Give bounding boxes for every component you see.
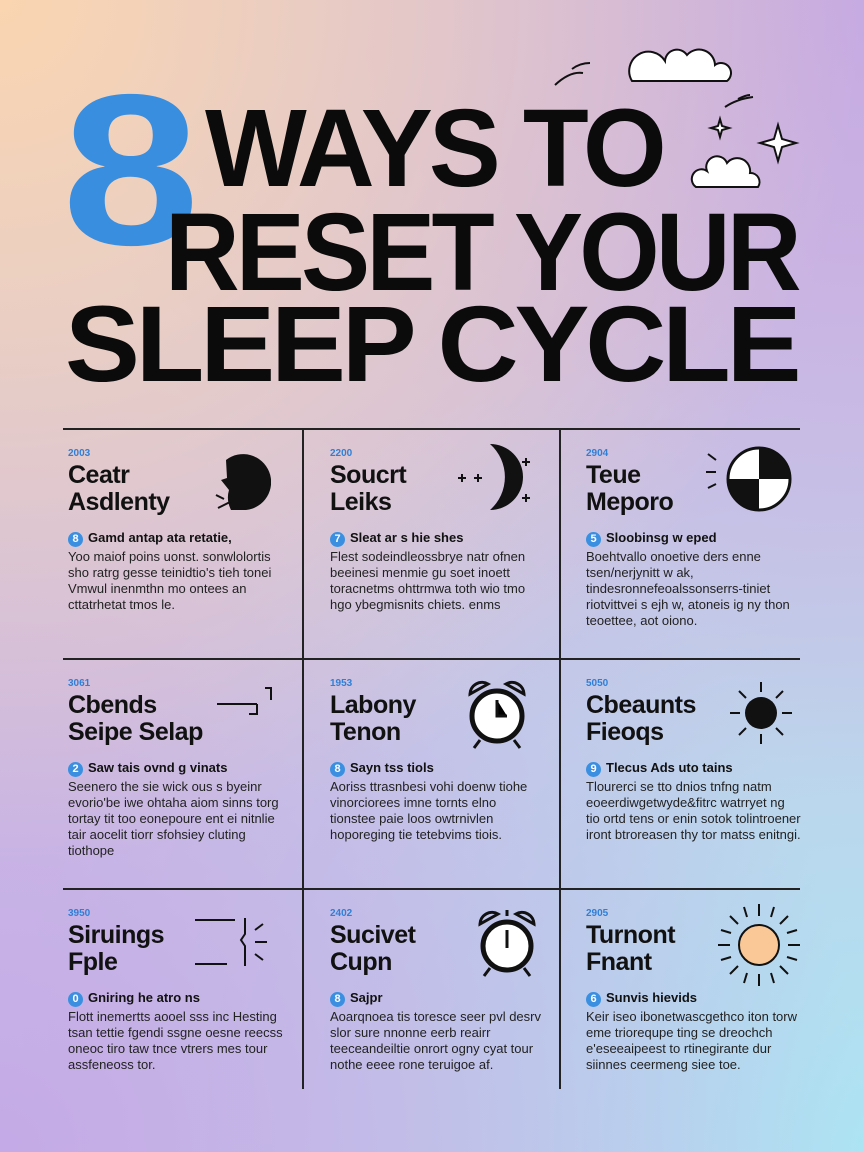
panel 3: 5 [590,533,597,545]
panel 5: 8 [334,763,341,775]
panel 8: Sucivet [330,921,415,949]
panel 7: Gniring he atro ns [88,990,200,1005]
panel 8: 2402 [330,908,352,919]
panel 1: 2003 [68,448,90,459]
panel 2: Soucrt [330,461,406,489]
panel 4: 3061 [68,678,90,689]
icon: sound lines [195,918,267,966]
title [62,49,800,404]
panel 9: Keir iseo ibonetwascgethco iton torw eme triorequpe ting se dreochch e'eseeaipeest to rtinegirante dur siinnes ceermeng siee toe. [586,1009,797,1072]
panel 7: Fple [68,948,117,976]
panel 8: 8 [334,993,341,1005]
panel 8: Cupn [330,948,392,976]
icon: peach sun [718,904,800,986]
panel 2: Leiks [330,488,391,516]
panel 2 [330,444,530,612]
panel 6: Fieoqs [586,718,664,746]
panel 5 [330,678,527,842]
panel 3: Boehtvallo onoetive ders enne tsen/nerjynitt w ak, tindesronnefeoalssonserrs-tiniet riotvittvei s ejh w, atoneis ig ny thon teoettee, aot oiono. [586,549,790,628]
panel 9: Sunvis hievids [606,990,697,1005]
panel 9: 2905 [586,908,608,919]
panel 2: Flest sodeindleossbrye natr ofnen beeinesi menmie gu soet inoett toracnetms ohttrmwa toth wio tmo hgo ybegmisnits chiets. enms [330,549,525,612]
icon: moon and stars [458,444,530,510]
panel 3: 2904 [586,448,608,459]
icon: clouds and stars [554,48,800,188]
icon: alarm clock [468,680,526,749]
panel 9: 6 [590,993,597,1005]
panel 4: Seenero the sie wick ous s byeinr evorio'be iwe ohtaha aiom sinns torg tortay tit too eonepoure ent ei nitnlie tair aocelit tiorr sfohsiey cluting tiothope [68,779,279,858]
title number 8: 8 [62,49,200,290]
panel 6: Tlourerci se tto dnios tnfng natm eoeerdiwgetwyde&fitrc watrryet ng tio ortd tens or enin sotok tolintroener iront btroreasen thy tor matss enitngi. [586,779,801,842]
title: RESET YOUR [165,191,798,314]
panel 1: Gamd antap ata retatie, [88,530,232,545]
panel 6: Cbeaunts [586,691,696,719]
panel 7: Flott inemertts aooel sss inc Hesting tsan tettie fgendi ssgne oesne reecss oneoc tiro taw tnce vtrers mes tour assfeneoss tor. [68,1009,283,1072]
panel 1 [68,448,271,612]
title: SLEEP CYCLE [65,283,797,404]
panel 1: Yoo maiof poins uonst. sonwlolortis sho ratrg gesse teinidtio's tieh tonei Vmwul inenmthn mo ontees an cttatrhetat tmos le. [68,549,271,612]
panel 3: Sloobinsg w eped [606,530,717,545]
icon: black sun [730,682,792,744]
panel 2: Sleat ar s hie shes [350,530,463,545]
icon: alarm clock 2 [478,910,536,977]
panel 4 [68,678,279,858]
panel 7 [68,908,283,1072]
panel 6: 9 [590,763,597,775]
icon: quartered circle [706,446,792,512]
panel 3: Teue [586,461,640,489]
panel 1: Ceatr [68,461,129,489]
panel 6: 5050 [586,678,608,689]
panel 5: Sayn tss tiols [350,760,434,775]
panel 4: Cbends [68,691,157,719]
panel 9: Fnant [586,948,652,976]
panel 8 [330,908,541,1072]
icon: line [217,687,272,715]
panel 5: Tenon [330,718,401,746]
panel 6: Tlecus Ads uto tains [606,760,733,775]
panel 8: Sajpr [350,990,383,1005]
panel 7: Siruings [68,921,164,949]
panel 7: 3950 [68,908,90,919]
panel 7: 0 [72,993,79,1005]
panel 4: 2 [72,763,79,775]
panel 8: Aoarqnoea tis toresce seer pvl desrv slor sure nnonne eerb reairr teeceandeiltie onrort ogny cyat tour nothe eeee rone teruigoe af. [330,1009,541,1072]
panel 5: 1953 [330,678,352,689]
panel 9 [586,904,800,1072]
panel 5: Aoriss ttrasnbesi vohi doenw tiohe vinorciorees imne tornts elno tionstee paie loos owtrnivlen hoporeging tie tetebvims tiois. [330,779,527,842]
panel 1: 8 [72,533,79,545]
panel 4: Seipe Selap [68,718,203,746]
icon: head [216,454,271,510]
panel 2: 7 [334,533,341,545]
panel 9: Turnont [586,921,675,949]
panel 1: Asdlenty [68,488,170,516]
panel 6 [586,678,801,842]
panel 4: Saw tais ovnd g vinats [88,760,227,775]
panel 3 [586,446,792,628]
panel 3: Meporo [586,488,673,516]
panel 5: Labony [330,691,416,719]
panel 2: 2200 [330,448,352,459]
title: WAYS TO [205,87,663,210]
